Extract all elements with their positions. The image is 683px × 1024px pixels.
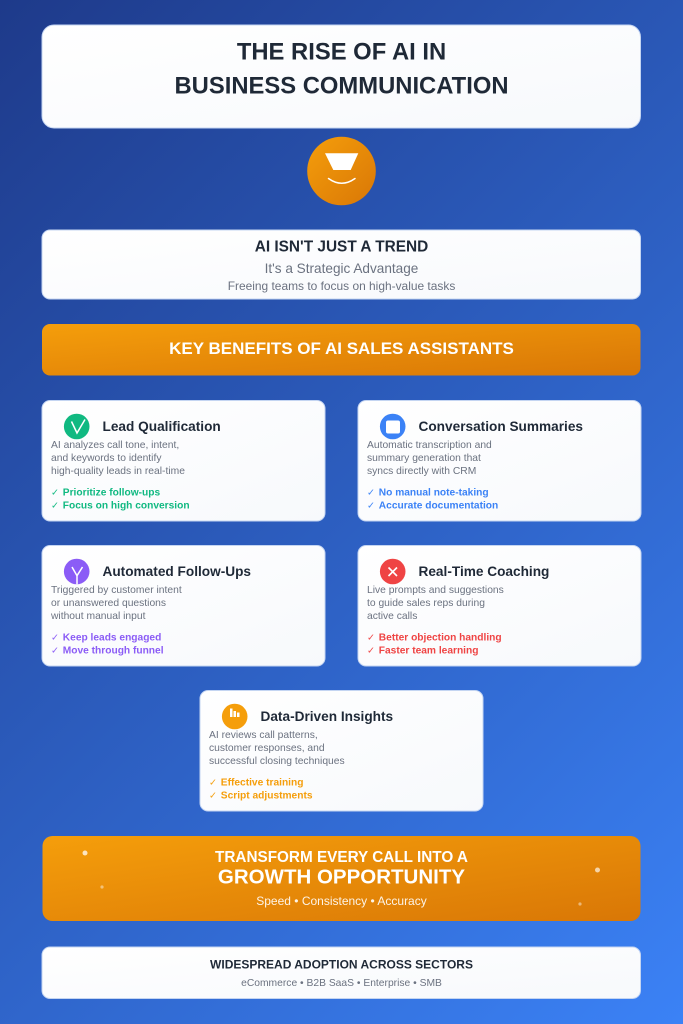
card benefits: Effective training bbox=[221, 778, 303, 788]
card description: customer responses, and bbox=[209, 743, 325, 754]
card: automated follow-ups bbox=[42, 546, 325, 666]
card benefits: ✓ bbox=[367, 632, 375, 644]
card benefits: ✓ bbox=[51, 646, 59, 656]
card benefits: Keep leads engaged bbox=[63, 632, 161, 644]
card benefits: ✓ bbox=[367, 488, 375, 498]
card benefits: ✓ bbox=[209, 790, 217, 802]
call to action heading: TRANSFORM EVERY CALL INTO A bbox=[215, 849, 468, 866]
card title: Real-Time Coaching bbox=[418, 564, 549, 579]
card description: syncs directly with CRM bbox=[367, 466, 476, 477]
card benefits: Accurate documentation bbox=[379, 500, 498, 512]
card benefits: ✓ bbox=[367, 500, 375, 512]
title: THE RISE OF AI IN bbox=[237, 38, 446, 66]
card title: Lead Qualification bbox=[102, 419, 221, 434]
call to action banner bbox=[42, 836, 640, 921]
card benefits: ✓ bbox=[51, 488, 59, 498]
card description: AI reviews call patterns, bbox=[209, 730, 318, 741]
panel: adoption across sectors bbox=[42, 947, 640, 998]
panel text: Freeing teams to focus on high-value tasks bbox=[228, 279, 455, 293]
banner: key benefits bbox=[42, 324, 640, 376]
icon: smiling funnel logo bbox=[307, 137, 376, 205]
card description: without manual input bbox=[50, 611, 146, 622]
card description: high-quality leads in real-time bbox=[51, 466, 185, 477]
call to action text: Speed • Consistency • Accuracy bbox=[256, 894, 427, 908]
sectors list: eCommerce • B2B SaaS • Enterprise • SMB bbox=[241, 978, 442, 989]
card description: Live prompts and suggestions bbox=[367, 585, 504, 596]
card description: Automatic transcription and bbox=[367, 440, 492, 451]
card description: to guide sales reps during bbox=[367, 598, 485, 609]
card description: successful closing techniques bbox=[209, 756, 345, 767]
icon: check mark bbox=[64, 414, 90, 439]
card benefits: ✓ bbox=[367, 646, 375, 656]
card title: Conversation Summaries bbox=[418, 419, 583, 434]
card title: Automated Follow-Ups bbox=[102, 564, 251, 579]
card: real-time coaching bbox=[358, 546, 641, 666]
card: data-driven insights bbox=[200, 690, 483, 811]
panel heading: AI ISN'T JUST A TREND bbox=[255, 238, 428, 256]
card description: and keywords to identify bbox=[51, 453, 162, 464]
card benefits: ✓ bbox=[209, 778, 217, 788]
card benefits: ✓ bbox=[51, 632, 59, 644]
card benefits: ✓ bbox=[51, 500, 59, 512]
icon: bar chart bbox=[222, 704, 248, 729]
decorative sparkles bbox=[82, 850, 600, 906]
card description: or unanswered questions bbox=[51, 598, 166, 609]
icon: square bbox=[380, 414, 406, 439]
icon: branching arrow bbox=[64, 559, 90, 584]
icon: cross bbox=[380, 559, 406, 584]
card benefits: Focus on high conversion bbox=[63, 500, 190, 512]
card benefits: Faster team learning bbox=[379, 646, 478, 656]
card description: active calls bbox=[367, 611, 417, 622]
card benefits: No manual note-taking bbox=[379, 488, 489, 498]
title panel bbox=[42, 25, 640, 128]
card benefits: Better objection handling bbox=[379, 632, 502, 644]
adoption heading: WIDESPREAD ADOPTION ACROSS SECTORS bbox=[210, 958, 473, 972]
card: conversation summaries bbox=[358, 400, 641, 521]
card description: AI analyzes call tone, intent, bbox=[51, 440, 179, 451]
call to action emphasis: GROWTH OPPORTUNITY bbox=[218, 866, 465, 888]
card: lead qualification bbox=[42, 400, 325, 521]
card description: Triggered by customer intent bbox=[51, 585, 182, 596]
card description: summary generation that bbox=[367, 453, 481, 464]
card benefits: Move through funnel bbox=[63, 646, 164, 656]
panel: AI isn't just a trend bbox=[42, 230, 640, 299]
panel subheading: It's a Strategic Advantage bbox=[265, 261, 418, 276]
card benefits: Script adjustments bbox=[221, 790, 313, 802]
banner: key benefits: KEY BENEFITS OF AI SALES ASSISTANTS bbox=[169, 339, 514, 358]
title: BUSINESS COMMUNICATION bbox=[174, 72, 509, 100]
card title: Data-Driven Insights bbox=[260, 709, 394, 724]
card benefits: Prioritize follow-ups bbox=[63, 488, 160, 498]
